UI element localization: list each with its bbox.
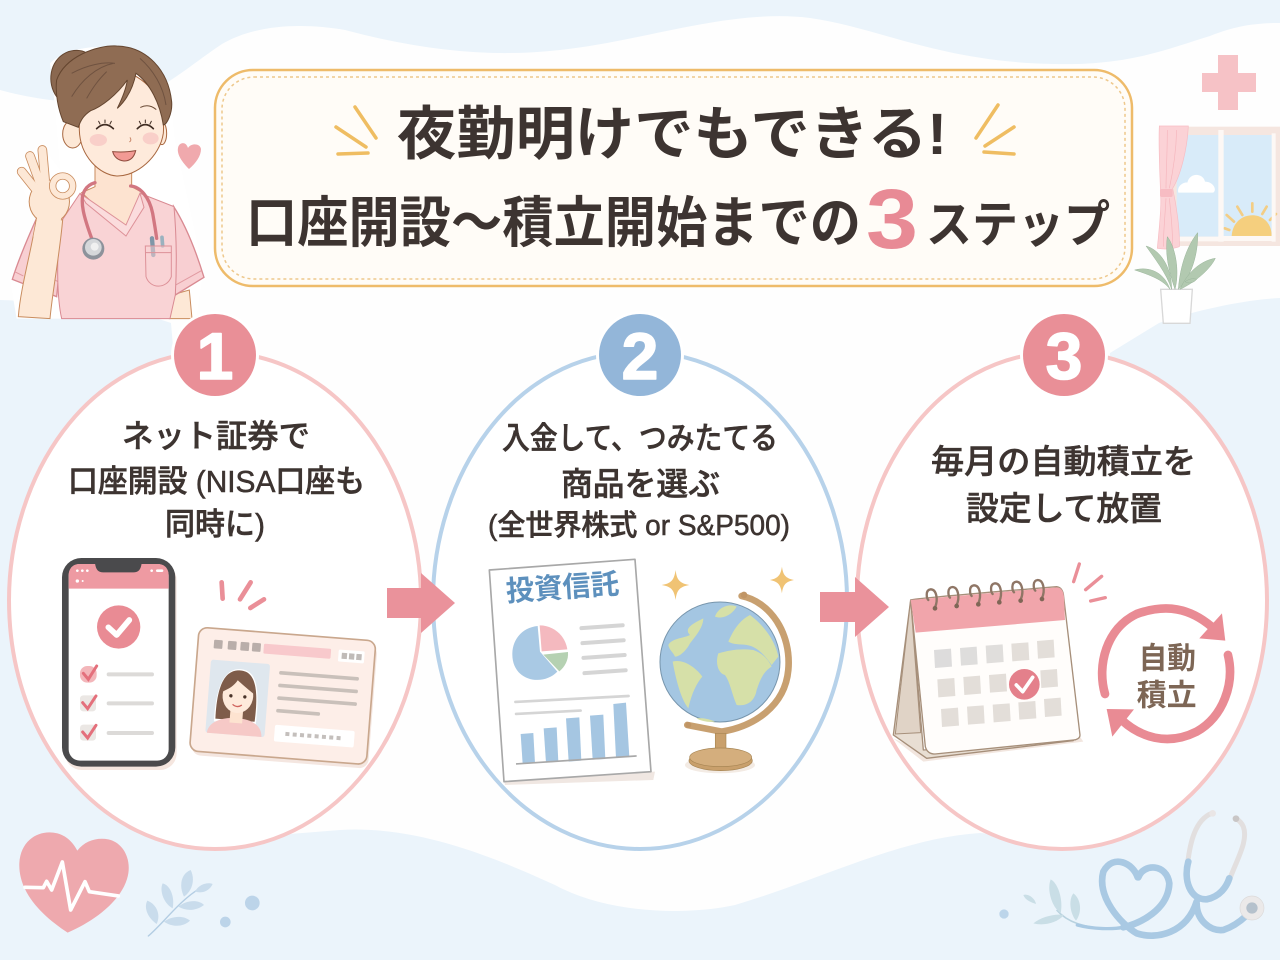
sparks: [1074, 564, 1105, 601]
title line 2: 口座開設〜積立開始までの: [246, 192, 861, 254]
calendar header: [911, 587, 1065, 633]
globe stand: [689, 733, 752, 771]
nurse mouth: [113, 151, 136, 161]
line: 同時に): [165, 507, 265, 542]
card number box: [274, 725, 355, 748]
doc title: 投資信託: [505, 568, 621, 608]
checklist row 3: [80, 725, 154, 741]
badge circle: [1023, 314, 1105, 396]
calendar stand: [893, 600, 1073, 758]
sun: [1225, 203, 1276, 236]
cycle arc top: [1102, 608, 1212, 694]
chest piece: [1240, 896, 1264, 920]
nurse hair: [56, 46, 172, 127]
nurse white halo: [10, 47, 203, 319]
illustration: window with curtain: [1135, 126, 1280, 323]
nurse pocket: [145, 246, 171, 286]
fingers fill: [22, 150, 45, 188]
badge circle: [174, 314, 256, 396]
calendar rings: [927, 580, 1044, 607]
illustration: heart stethoscope: [999, 810, 1264, 936]
dots: [220, 896, 260, 927]
nurse arm and ok hand: [18, 150, 73, 319]
sparkle stars: [662, 567, 794, 600]
line: ネット証券で: [122, 418, 310, 454]
title box: [215, 70, 1132, 286]
heart tube: [1102, 862, 1246, 936]
card text lines: [276, 671, 359, 719]
icon: small heart: [178, 143, 201, 169]
title dashed border: [222, 77, 1125, 279]
cycle arrowhead bottom: [1107, 709, 1134, 737]
nurse left ear: [63, 120, 83, 148]
title line 2 end: ステップ: [926, 197, 1110, 253]
cloud: [1178, 175, 1215, 193]
arm join: [33, 217, 62, 237]
badge number: 2: [622, 319, 658, 393]
title number 3: 3: [866, 172, 918, 266]
card shadow: [191, 631, 378, 769]
nurse right ear: [157, 122, 167, 145]
curtain: [1157, 126, 1188, 249]
badge circle: [599, 314, 681, 396]
doc text lines: [514, 623, 630, 715]
step 2 badge: [596, 311, 684, 399]
checklist row 2: [80, 695, 154, 711]
cycle arrowhead top: [1199, 613, 1225, 641]
card body: [189, 627, 376, 765]
step 2 text: [488, 421, 790, 542]
nurse pens: [152, 237, 163, 255]
ear tubes: [1188, 813, 1245, 878]
step 1 text: [68, 418, 365, 542]
pie chart: [512, 625, 568, 680]
heart: [19, 832, 129, 933]
phone check circle: [97, 605, 140, 649]
calendar stand inner: [895, 600, 921, 734]
phone body: [62, 558, 175, 767]
nurse sleeve cuffs: [15, 271, 201, 286]
phone header: [69, 564, 169, 589]
step 1 badge: [171, 311, 259, 399]
window sky: [1177, 135, 1273, 237]
palm outline: [29, 180, 70, 224]
illustration: smartphone: [62, 558, 264, 770]
title line 1: 夜勤明けでもできる!: [397, 102, 947, 167]
panel: step 1 oval: [9, 352, 421, 849]
plant pot: [1161, 289, 1192, 323]
leaf stem join: [1077, 925, 1123, 929]
card top marks: [214, 640, 261, 652]
calendar ring holes: [933, 597, 1044, 611]
line: 商品を選ぶ: [561, 466, 720, 502]
phone screen: [69, 564, 169, 761]
plant leaves: [1135, 233, 1215, 289]
badge number: 3: [1046, 319, 1082, 393]
calendar page: [911, 587, 1080, 754]
cycle arc bottom: [1122, 655, 1230, 739]
window mullion: [1177, 130, 1276, 242]
phone shadow: [65, 563, 177, 770]
nurse hair strands: [72, 58, 166, 105]
card top right box: [338, 649, 365, 663]
line: 入金して、つみたてる: [502, 421, 778, 456]
icon: medical cross: [1202, 55, 1256, 110]
badge ring: [596, 311, 684, 399]
illustration: globe: [660, 567, 794, 773]
nurse hair bun: [51, 50, 86, 97]
calendar shadow: [893, 737, 1083, 762]
ear tips: [1209, 810, 1239, 822]
step 3 badge: [1020, 311, 1108, 399]
illustration: fund document: [489, 559, 655, 785]
cycle text 2: 積立: [1137, 679, 1197, 712]
nurse sleeve right: [167, 206, 204, 295]
sparks: [222, 582, 264, 608]
nurse neck: [82, 162, 143, 234]
globe sphere: [660, 602, 780, 722]
nurse stethoscope chest piece: [82, 238, 104, 260]
nurse face: [79, 75, 164, 176]
nurse nose: [129, 137, 131, 142]
window frame: [1162, 127, 1280, 246]
panel: step 3 oval: [857, 352, 1267, 849]
card pink bar: [263, 644, 331, 659]
nurse collar band: [80, 193, 144, 236]
badge ring: [1020, 311, 1108, 399]
nurse cheeks: [90, 132, 159, 146]
calendar grid: [934, 640, 1062, 727]
title panel: [215, 70, 1132, 286]
nurse eyes and brow: [97, 106, 156, 129]
illustration: nurse: [10, 46, 204, 319]
nurse stethoscope tube: [82, 183, 157, 238]
sparks right: [976, 105, 1014, 154]
arrow: step 2 to step 3: [820, 577, 889, 637]
leaves: [999, 879, 1110, 928]
globe arm: [687, 596, 789, 732]
line: 毎月の自動積立を: [931, 443, 1196, 480]
nurse sleeve left: [12, 217, 63, 297]
globe shadow: [685, 757, 755, 773]
nurse forearm right: [169, 290, 192, 319]
phone notch: [95, 563, 142, 572]
illustration: heart with ecg: [19, 832, 129, 933]
calendar check: [1009, 669, 1040, 700]
branch: [148, 888, 200, 936]
step 3 text: [931, 443, 1196, 527]
illustration: left leaf sprig and dots: [146, 870, 260, 936]
doc shadow: [503, 772, 655, 785]
continents: [668, 605, 778, 722]
panel: step 2 oval: [433, 352, 847, 849]
line: (全世界株式 or S&P500): [488, 509, 790, 542]
nurse scrubs body: [58, 193, 176, 319]
palm fill: [30, 181, 69, 223]
illustration: id card: [189, 627, 378, 769]
ecg line: [25, 862, 118, 910]
line: 設定して放置: [966, 490, 1162, 527]
ring fill: [53, 176, 73, 196]
arm: [18, 217, 63, 319]
ring outline: [53, 176, 73, 196]
cycle text 1: 自動: [1139, 643, 1196, 676]
line: 口座開設 (NISA口座も: [68, 464, 365, 499]
illustration: auto cycle arrows: [1102, 608, 1230, 739]
bar chart: [516, 703, 637, 764]
leaves: [146, 870, 213, 926]
card photo: [205, 659, 270, 737]
fingers outline: [22, 150, 45, 188]
sparks left: [336, 107, 376, 154]
badge number: 1: [197, 319, 233, 393]
phone status dots: [76, 569, 163, 583]
doc body: [489, 559, 651, 782]
globe pin: [685, 592, 747, 728]
badge ring: [171, 311, 259, 399]
arrow: step 1 to step 2: [387, 573, 455, 633]
illustration: desk calendar: [893, 564, 1105, 762]
checklist row 1: [80, 666, 154, 683]
